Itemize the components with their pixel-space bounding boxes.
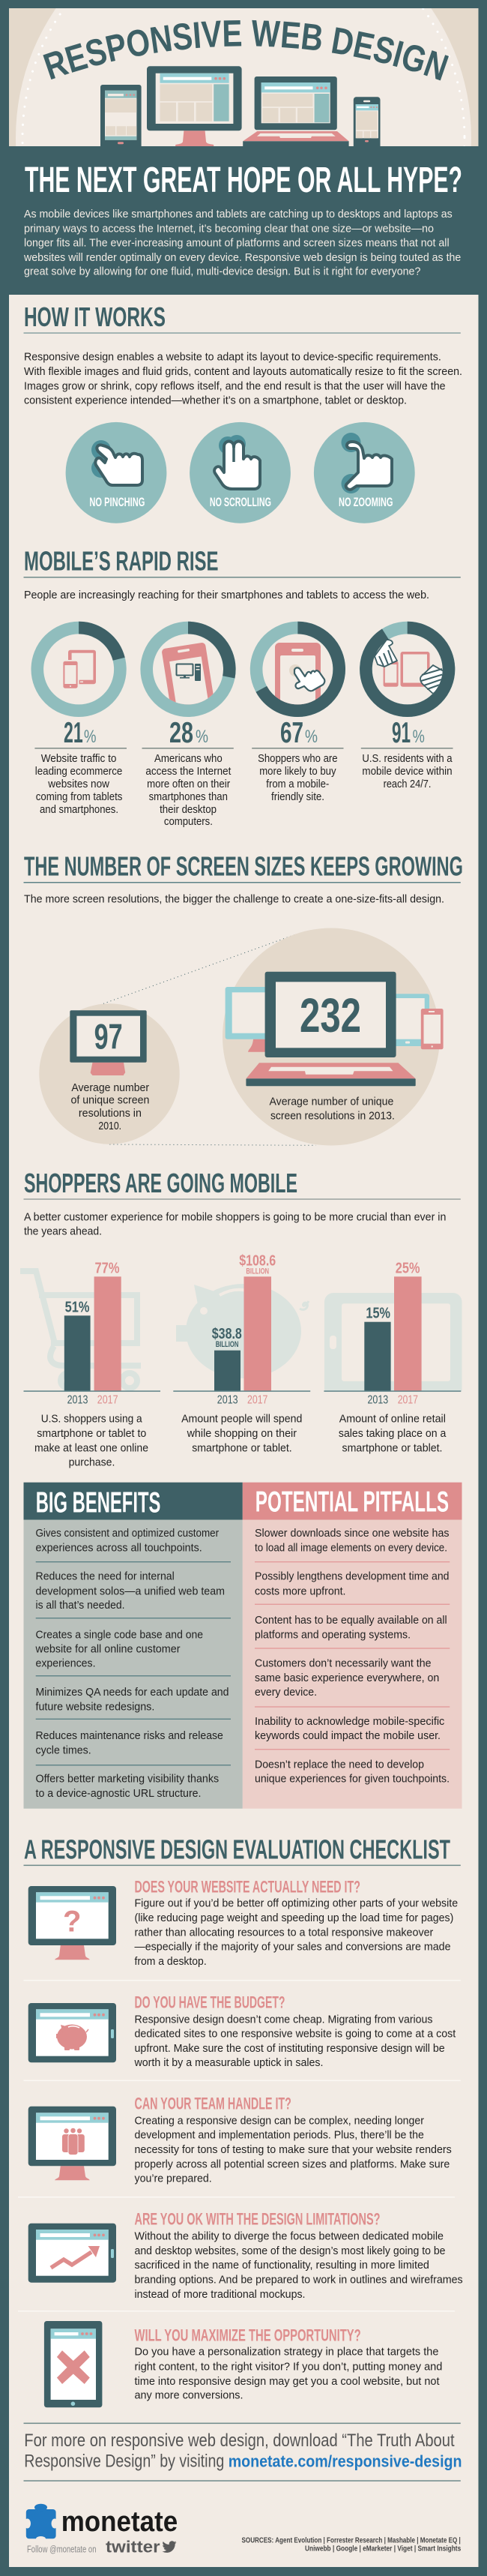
text block: pitfalls list: Slower downloads since one website has: [255, 1527, 450, 1540]
text block: mobile intro: People are increasingly reaching for their smartphones and tablets to access the web.: [24, 589, 429, 601]
text block: pitfalls list: Doesn’t replace the need to develop: [255, 1759, 424, 1771]
stat: 91 percent: mobile device within: [362, 765, 453, 778]
stat: 28 percent: more often on their: [147, 778, 230, 790]
icon: no zooming: [314, 422, 415, 523]
checklist text: properly across all potential screen sizes and platforms. Make sure: [135, 2158, 450, 2170]
icon: no zooming: NO ZOOMING: [339, 495, 393, 509]
stat: 21 percent: 21: [64, 717, 83, 749]
stat: 28 percent: their desktop: [160, 803, 217, 816]
bar chart: online retail sales: 2017: [398, 1394, 418, 1407]
checklist text: —especially if the majority of your sales and conversions are made: [135, 1941, 451, 1954]
text block: benefits list: website for all online customer: [35, 1642, 181, 1655]
checklist item: can your team handle it: [28, 2095, 452, 2185]
stat: 91 percent: reach 24/7.: [384, 778, 431, 790]
chart: 2010 screen resolutions: Average number: [71, 1081, 149, 1094]
icon: puzzle piece: [24, 2504, 58, 2542]
bar chart: shoppers using a smartphone: [20, 1260, 160, 1468]
checklist text: Do you have a personalization strategy in place that targets the: [135, 2346, 438, 2359]
chart: 2010 screen resolutions: resolutions in: [79, 1107, 142, 1120]
checklist text: (like reducing page weight and speeding up the load time for pages): [135, 1912, 453, 1924]
bar chart: online retail sales: 25%: [396, 1260, 420, 1276]
text block: pitfalls list: costs more upfront.: [255, 1585, 346, 1597]
panel: shoppers are going mobile: [20, 1168, 462, 1468]
text block: benefits list: Reduces maintenance risks and release: [36, 1729, 223, 1742]
text block: pitfalls list: Inability to acknowledge mobile-specific: [255, 1715, 445, 1728]
text block: benefits list: Reduces the need for internal: [36, 1570, 175, 1583]
checklist text: Creating a responsive design can be complex, needing longer: [135, 2115, 424, 2128]
icon: shopping cart: [20, 1271, 141, 1388]
stat: 21 percent: Website traffic to: [41, 752, 117, 765]
stat: 67 percent: 67: [280, 717, 303, 749]
bar chart: shoppers using a smartphone: smartphone or tablet to: [37, 1427, 146, 1440]
bar chart: shoppers using a smartphone: 2013: [67, 1394, 88, 1407]
icon: piggy bank: [176, 1284, 309, 1378]
text block: shoppers intro: the years ahead.: [24, 1225, 102, 1238]
text block: benefits list: cycle times.: [36, 1744, 91, 1756]
icon: tablet silhouette: [324, 1293, 462, 1391]
title: Responsive Web Design: RESPONSIVE WEB DESIGN: [43, 19, 449, 81]
bar chart: online retail sales: 2013: [367, 1394, 388, 1407]
icon: tablet with cross: [44, 2321, 102, 2407]
icon: tilted phone with computer: [162, 643, 213, 705]
stat: 21 percent: leading ecommerce: [35, 765, 122, 778]
icon: tablet with rising arrow: [28, 2224, 116, 2283]
bar chart: amount people will spend: [173, 1252, 310, 1455]
bar chart: online retail sales: sales taking place on a: [339, 1427, 447, 1440]
panel: big benefits: [24, 1483, 243, 1809]
panel: mobile's rapid rise: [24, 546, 461, 828]
chart: 2013 screen resolutions: screen resolutions in 2013.: [270, 1110, 395, 1123]
text block: pitfalls list: same basic experience everywhere, on: [255, 1672, 439, 1684]
icon: laptop: [243, 76, 349, 146]
bar chart: shoppers using a smartphone: 2017: [97, 1394, 118, 1407]
checklist text: development and implementation periods. Plus, there’ll be the: [135, 2129, 424, 2142]
icon: monitor with question mark: ?: [63, 1906, 81, 1939]
text block: how it works description: consistent experience intended—whether it’s on a smartphone, tablet or desktop.: [24, 394, 407, 406]
text block: screen sizes intro: The more screen resolutions, the bigger the challenge to create a one-size-fits-all design.: [24, 892, 444, 905]
text block: how it works description: Responsive design enables a website to adapt its layout to device-specific requirements.: [24, 351, 441, 363]
checklist text: [135, 1877, 458, 1968]
text block: benefits list: [35, 1527, 229, 1800]
checklist text: sacrificed in the name of functionality, resulting in more limited: [135, 2259, 429, 2272]
stat: 67 percent: Shoppers who are: [258, 752, 338, 765]
checklist text: Without the ability to diverge the focus between dedicated mobile: [135, 2230, 444, 2243]
checklist text: CAN YOUR TEAM HANDLE IT?: [135, 2095, 291, 2113]
bar chart: online retail sales: smartphone or tablet.: [342, 1442, 442, 1455]
chart: 2010 screen resolutions: [39, 1003, 180, 1144]
stat: 67 percent: more likely to buy: [259, 765, 336, 778]
bar chart: shoppers using a smartphone: purchase.: [69, 1456, 115, 1468]
stat: 67 percent: %: [305, 727, 318, 747]
chart: 2013 screen resolutions: [223, 928, 444, 1146]
checklist text: from a desktop.: [135, 1955, 207, 1968]
heading: shoppers are going mobile: SHOPPERS ARE GOING MOBILE: [24, 1168, 297, 1198]
text block: benefits list: future website redesigns.: [36, 1700, 154, 1713]
icon: no scrolling: [190, 422, 291, 523]
icon: hands holding devices: [375, 640, 444, 694]
checklist text: upfront. Make sure the cost of instituting responsive design will be: [135, 2042, 445, 2055]
bar chart: amount people will spend: $38.8: [212, 1326, 242, 1342]
icon: no pinching: NO PINCHING: [89, 495, 145, 509]
panel: screen sizes: [24, 850, 463, 1146]
checklist text: branding options. And be prepared to work in outlines and wireframes: [135, 2273, 463, 2286]
text block: benefits list: to a device-agnostic URL structure.: [36, 1787, 201, 1800]
checklist text: Responsive design doesn’t come cheap. Migrating from various: [135, 2013, 433, 2026]
heading: big benefits: BIG BENEFITS: [36, 1487, 160, 1519]
sources: [241, 2536, 461, 2554]
icon: tablet with piggy bank: [28, 2003, 116, 2062]
checklist text: [135, 2326, 442, 2402]
checklist text: rather than allocating resources to a total responsive makeover: [135, 1927, 433, 1939]
social: follow on twitter: twitter: [106, 2537, 160, 2556]
checklist item: does your website need it: [28, 1877, 458, 1968]
stat: 28 percent: %: [196, 727, 208, 747]
icon: monitor with question mark: [28, 1886, 116, 1960]
social: follow on twitter: Follow @monetate on: [27, 2543, 96, 2554]
text block: pitfalls list: every device.: [255, 1686, 317, 1699]
checklist item: do you have the budget: [28, 1993, 456, 2069]
bar chart: amount people will spend: 2013: [217, 1394, 238, 1407]
text block: introduction: primary ways to access the Internet, it’s becoming clear that one size—or website—no: [24, 222, 434, 235]
stat: 91 percent: 91: [392, 717, 411, 749]
text block: pitfalls list: unique experiences for given touchpoints.: [255, 1773, 450, 1786]
icon: tablet: [100, 85, 142, 146]
panel: hero banner: [9, 8, 478, 146]
icon: phone with tapping hand: [275, 643, 325, 705]
heading: mobile's rapid rise: MOBILE’S RAPID RISE: [24, 546, 219, 577]
text block: shoppers intro: [24, 1211, 446, 1238]
chart: 2013 screen resolutions: 232: [300, 988, 361, 1042]
checklist text: right content, to the right visitor? If you don’t, putting money and: [135, 2360, 442, 2373]
checklist text: DOES YOUR WEBSITE ACTUALLY NEED IT?: [135, 1877, 360, 1896]
text block: benefits list: experiences.: [36, 1657, 96, 1670]
text block: benefits list: is all that’s needed.: [36, 1599, 124, 1612]
bar chart: shoppers using a smartphone: 51%: [65, 1299, 90, 1315]
logo: monetate: monetate: [61, 2506, 178, 2538]
checklist text: any more conversions.: [135, 2389, 243, 2402]
text block: benefits list: Offers better marketing visibility thanks: [36, 1773, 219, 1786]
panel: potential pitfalls: [243, 1483, 462, 1809]
stat: 67 percent: friendly site.: [271, 790, 324, 803]
checklist text: you’re prepared.: [135, 2172, 212, 2185]
stat: 67 percent: [252, 628, 343, 803]
bar chart: amount people will spend: smartphone or tablet.: [192, 1442, 292, 1455]
text block: pitfalls list: to load all image elements on every device.: [255, 1541, 447, 1554]
checklist text: Figure out if you’d be better off optimizing other parts of your website: [135, 1897, 458, 1910]
bar chart: online retail sales: 15%: [366, 1305, 390, 1321]
bar chart: shoppers using a smartphone: 77%: [94, 1260, 120, 1276]
text block: pitfalls list: platforms and operating systems.: [255, 1628, 411, 1641]
icon: desktop monitor: [147, 66, 242, 146]
checklist text: worth it by a measurable uptick in sales.: [134, 2056, 324, 2069]
checklist text: [135, 2095, 452, 2185]
bar chart: amount people will spend: BILLION: [216, 1340, 238, 1349]
text block: pitfalls list: Customers don’t necessarily want the: [255, 1657, 432, 1670]
chart: 2010 screen resolutions: 2010.: [98, 1120, 121, 1132]
bar chart: shoppers using a smartphone: make at least one online: [34, 1442, 148, 1455]
stat: 91 percent: %: [413, 727, 425, 747]
logo: monetate: [24, 2504, 178, 2542]
callout: download the truth about responsive design: monetate.com/responsive-design: [229, 2452, 462, 2470]
stat: 28 percent: access the Internet: [145, 765, 232, 778]
stat: 21 percent: coming from tablets: [36, 790, 122, 803]
callout: download the truth about responsive design: Responsive Design” by visiting: [24, 2451, 224, 2471]
chart: 2010 screen resolutions: 97: [94, 1016, 123, 1056]
icon: phone: [354, 97, 381, 146]
checklist item: design limitations: [28, 2210, 463, 2301]
stat: 21 percent: [34, 628, 127, 816]
bar chart: shoppers using a smartphone: U.S. shoppers using a: [41, 1413, 142, 1426]
stat: 91 percent: [361, 628, 453, 790]
text block: how it works description: With flexible images and fluid grids, content and layouts automatically resize to fit the screen.: [24, 365, 462, 378]
text block: benefits list: Minimizes QA needs for each update and: [36, 1686, 229, 1699]
stat: 28 percent: [142, 628, 234, 828]
stat: 28 percent: 28: [169, 717, 193, 749]
stat: 21 percent: websites now: [47, 778, 109, 790]
text block: benefits list: Creates a single code base and one: [36, 1628, 203, 1641]
icon: monitor with team: [28, 2107, 116, 2180]
checklist text: [135, 2210, 463, 2301]
icon: twitter bird: [162, 2541, 177, 2553]
bar chart: amount people will spend: $108.6: [239, 1252, 276, 1269]
icon: tablet and phone: [61, 650, 96, 690]
checklist text: [134, 1993, 456, 2069]
bar chart: online retail sales: Amount of online retail: [339, 1413, 446, 1426]
checklist text: dedicated sites to one responsive website is going to come at a cost: [135, 2028, 456, 2041]
text block: introduction: great solve by allowing for one fluid, multi-device design. But is it right for everyone?: [24, 265, 420, 278]
checklist text: WILL YOU MAXIMIZE THE OPPORTUNITY?: [135, 2326, 361, 2345]
stat: 28 percent: computers.: [164, 815, 213, 828]
bar chart: online retail sales: [324, 1260, 462, 1455]
checklist text: and desktop websites, some of the design’s most likely going to be: [135, 2245, 445, 2257]
text block: how it works description: [24, 351, 462, 406]
text block: introduction: websites will render optimally on every device. Responsive web design is being touted as the: [23, 251, 461, 264]
text block: how it works description: Images grow or shrink, copy reflows itself, and the end result is that the user will have the: [24, 379, 446, 392]
chart: 2013 screen resolutions: Average number of unique: [270, 1095, 393, 1108]
text block: introduction: [23, 208, 461, 278]
stat: 21 percent: %: [84, 727, 96, 747]
icon: no pinching: [66, 422, 166, 523]
text block: pitfalls list: keywords could impact the mobile user.: [255, 1729, 441, 1742]
checklist item: maximize the opportunity: [44, 2321, 442, 2407]
panel: how it works: [24, 301, 462, 523]
social: follow on twitter: [27, 2537, 177, 2556]
checklist text: necessity for tons of testing to make sure that your website renders: [135, 2143, 452, 2156]
text block: pitfalls list: [255, 1527, 450, 1786]
text block: benefits list: development solos—a unified web team: [36, 1585, 225, 1597]
bar chart: amount people will spend: Amount people will spend: [181, 1413, 302, 1426]
text block: benefits list: Gives consistent and optimized customer: [36, 1527, 219, 1540]
bar chart: amount people will spend: 2017: [247, 1394, 267, 1407]
text block: introduction: As mobile devices like smartphones and tablets are catching up to desktops and laptops as: [24, 208, 453, 220]
stat: 28 percent: smartphones than: [149, 790, 228, 803]
text block: pitfalls list: Content has to be equally available on all: [255, 1614, 447, 1627]
text block: pitfalls list: Possibly lengthens development time and: [255, 1570, 450, 1583]
text block: shoppers intro: A better customer experience for mobile shoppers is going to be more crucial than ever in: [24, 1211, 446, 1224]
chart: 2010 screen resolutions: of unique screen: [70, 1094, 149, 1107]
text block: introduction: longer fits all. The ever-increasing amount of platforms and screen sizes means that not all: [24, 237, 450, 250]
text block: benefits list: experiences across all touchpoints.: [36, 1541, 202, 1554]
stat: 67 percent: from a mobile-: [266, 778, 329, 790]
checklist text: time into responsive design may get you a cool website, but not: [135, 2375, 440, 2388]
icon: no scrolling: NO SCROLLING: [210, 495, 271, 509]
stat: 28 percent: Americans who: [154, 752, 223, 765]
stat: 91 percent: U.S. residents with a: [362, 752, 453, 765]
bar chart: amount people will spend: while shopping on their: [187, 1427, 297, 1440]
bar chart: amount people will spend: BILLION: [246, 1267, 269, 1276]
stat: 21 percent: and smartphones.: [40, 803, 118, 816]
checklist text: DO YOU HAVE THE BUDGET?: [135, 1993, 285, 2011]
heading: how it works: HOW IT WORKS: [24, 301, 166, 332]
checklist text: instead of more traditional mockups.: [135, 2288, 306, 2301]
callout: download the truth about responsive design: [24, 2431, 462, 2471]
